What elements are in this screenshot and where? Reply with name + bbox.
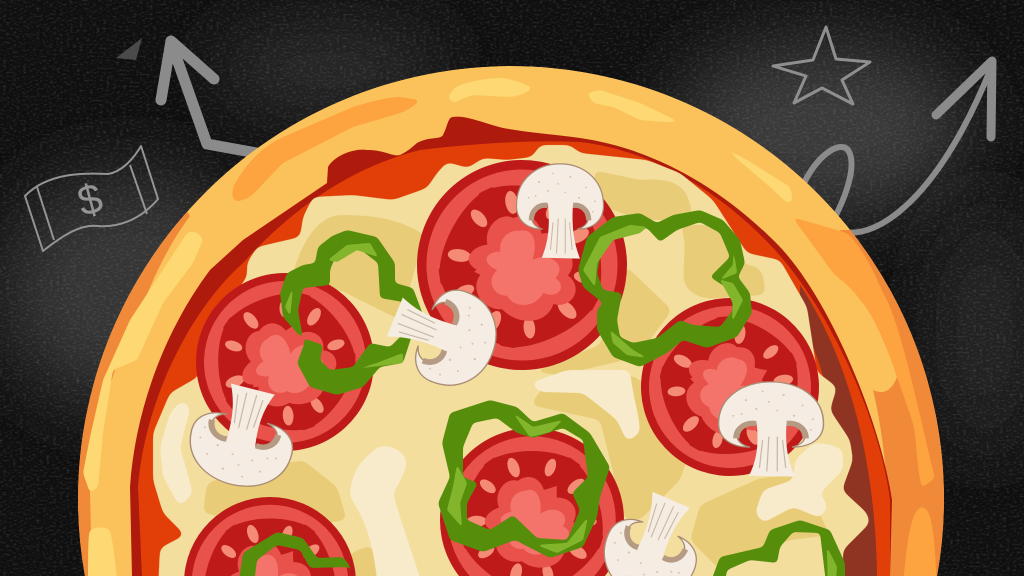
sauce: brown baked area [800, 285, 877, 576]
chalk icon: dollar bill: $ [73, 174, 107, 225]
cheese: darker patches [203, 170, 830, 576]
sauce: orange-red layer [138, 141, 890, 576]
chalk icon: dollar bill [25, 146, 158, 251]
tomato slices [171, 143, 852, 576]
mushroom: left [182, 377, 304, 496]
tomato: top center [400, 143, 644, 387]
tomato: left [171, 248, 399, 476]
pepper: bottom center [438, 400, 610, 558]
green pepper rings [236, 210, 845, 576]
tomato: right [608, 265, 852, 509]
cheese [153, 145, 870, 576]
mushrooms [182, 164, 824, 576]
pepper: top right [578, 210, 752, 367]
tomato: bottom center [440, 428, 624, 576]
chalk arrow: right, looping up [800, 61, 992, 233]
mushroom: right [718, 382, 824, 477]
chalk star [773, 27, 870, 104]
pepper: bottom left [236, 532, 369, 576]
cheese: light strands [160, 370, 843, 576]
pizza [60, 66, 960, 576]
mushroom: center left [377, 271, 510, 398]
tomato: bottom left [184, 497, 356, 576]
mushroom: top center [516, 164, 604, 259]
pepper: left [280, 230, 425, 395]
crust [60, 66, 960, 576]
sauce: dark red layer [130, 117, 892, 576]
mushroom: bottom [591, 482, 715, 576]
pepper: bottom right [704, 520, 845, 576]
chalk arrow: left, pointing up [161, 41, 268, 155]
